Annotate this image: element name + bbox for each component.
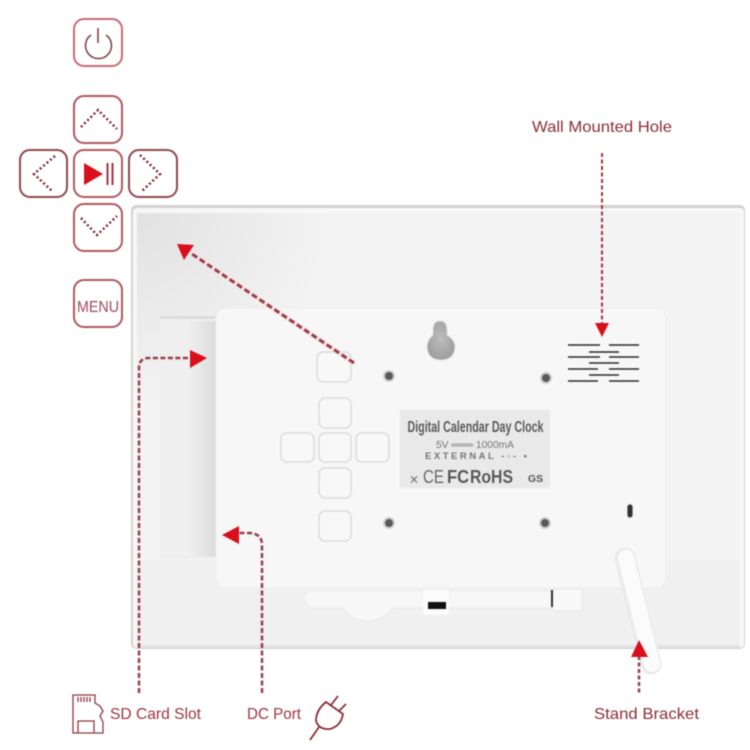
icon: menu button: [74, 280, 122, 327]
product label: RoHS: [470, 467, 513, 487]
rear panel buttons: [281, 352, 389, 541]
product label: FC: [447, 467, 469, 487]
arrow: wall mounted hole: [595, 153, 609, 337]
product label: Digital Calendar Day Clock: [408, 419, 544, 436]
photo frame back: [131, 205, 745, 649]
icon: power button: [74, 19, 122, 66]
product label: CE: [423, 467, 444, 487]
screws: [384, 371, 551, 528]
stand bracket: [625, 558, 652, 664]
label: wall mounted hole: Wall Mounted Hole: [532, 119, 672, 136]
DC port opening: [428, 602, 446, 609]
icon: right button: [129, 150, 177, 197]
arrow: SD card slot: [139, 350, 207, 693]
icon: down button: [74, 204, 122, 251]
icon: up button: [74, 96, 122, 143]
speaker vent holes: [568, 345, 639, 381]
wall mount keyhole: [427, 321, 455, 360]
small oval slot: [627, 504, 633, 518]
arrow: to frame corner: [177, 244, 354, 363]
arrow: DC port: [222, 526, 262, 693]
icon: left button: [20, 150, 67, 197]
bracket hinge: [552, 589, 582, 611]
label: stand bracket: Stand Bracket: [594, 706, 700, 723]
label: sd card slot: SD Card Slot: [110, 706, 202, 723]
raised back panel: [216, 308, 666, 588]
product label: [400, 410, 550, 488]
product label: GS: [528, 474, 543, 485]
arrow: stand bracket: [631, 640, 648, 695]
product label: EXTERNAL -◦- •: [425, 451, 528, 462]
icon: sd card: [73, 695, 103, 733]
icon: menu button: MENU: [77, 299, 119, 316]
product label: 5V ═══ 1000mA: [436, 440, 514, 451]
label: dc port: DC Port: [247, 706, 302, 723]
left slot recess: [160, 316, 218, 319]
icon: play pause button: [74, 150, 122, 197]
icon: plug: [310, 696, 346, 740]
product label: ⨯: [409, 472, 419, 486]
bottom slot: [304, 591, 552, 621]
